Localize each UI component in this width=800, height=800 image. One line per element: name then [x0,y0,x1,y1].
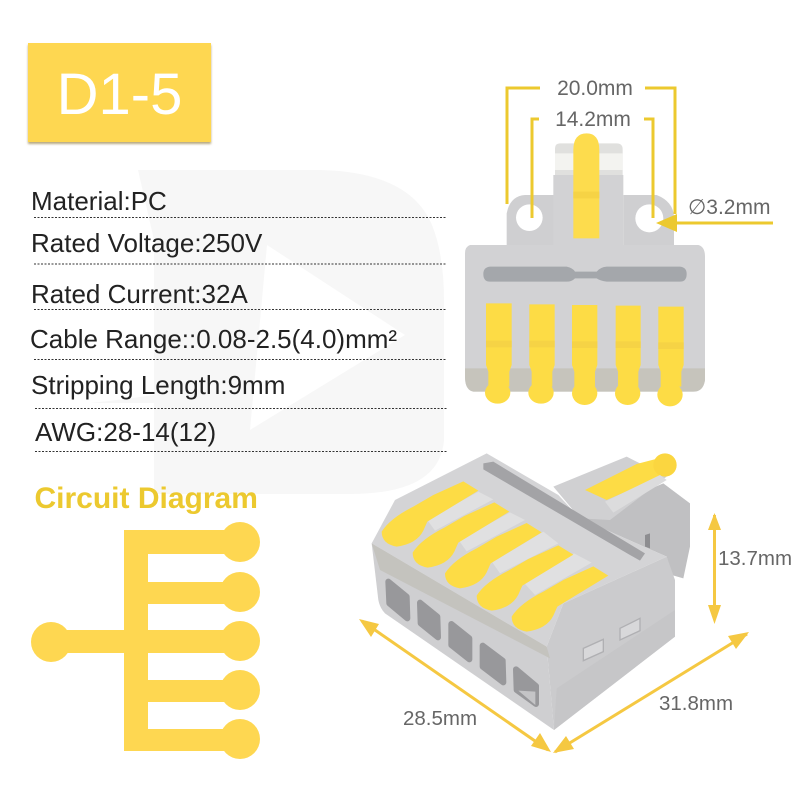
product: top view connector [465,133,705,406]
dimension: hole diameter 3.2mm: ∅3.2mm [688,196,770,219]
dimension: 20.0mm [507,77,675,214]
rear lever [585,453,677,513]
main body [465,245,705,392]
product: isometric connector [372,453,690,730]
dividers between levers [427,492,592,595]
dimension: 14.2mm [532,108,653,218]
spec list [30,186,448,452]
front face [372,543,554,730]
badge: D1-5 [28,43,211,144]
dimension: 20.0mm: 20.0mm [557,77,633,100]
ribbed band [372,543,550,658]
mounting ears [507,195,674,245]
spec: rated current: Rated Current:32A [31,279,248,309]
side windows [583,618,640,661]
top slot [483,462,645,561]
dimension: 31.8mm: 31.8mm [659,692,733,715]
stem tip [555,143,623,177]
top face [372,453,667,647]
rear stem top [553,457,667,520]
five levers [485,303,684,406]
spec: stripping length: Stripping Length:9mm [31,370,285,400]
dimension: 13.7mm [708,513,792,624]
spec: material: Material:PC [31,186,167,216]
spec: cable range: Cable Range::0.08-2.5(4.0)mm² [30,324,397,354]
centre lever [573,133,599,238]
dimension: 13.7mm: 13.7mm [718,547,792,570]
badge label: D1-5 [57,62,182,127]
spec: rated voltage: Rated Voltage:250V [31,228,263,258]
dimension: hole diameter 3.2mm [656,196,773,232]
dimension: 14.2mm: 14.2mm [555,108,631,131]
spec: AWG: AWG:28-14(12) [35,417,216,447]
dimension: 31.8mm [553,632,749,753]
circuit diagram heading: Circuit Diagram [34,482,258,515]
watermark logo [90,170,444,494]
rear stem side [580,483,690,578]
circuit diagram [31,522,260,759]
slot [483,267,687,282]
levers [382,481,608,632]
dimension: 28.5mm: 28.5mm [403,707,477,730]
right face [547,557,675,730]
dimension: 28.5mm [359,619,551,752]
terminal holes [388,582,536,704]
